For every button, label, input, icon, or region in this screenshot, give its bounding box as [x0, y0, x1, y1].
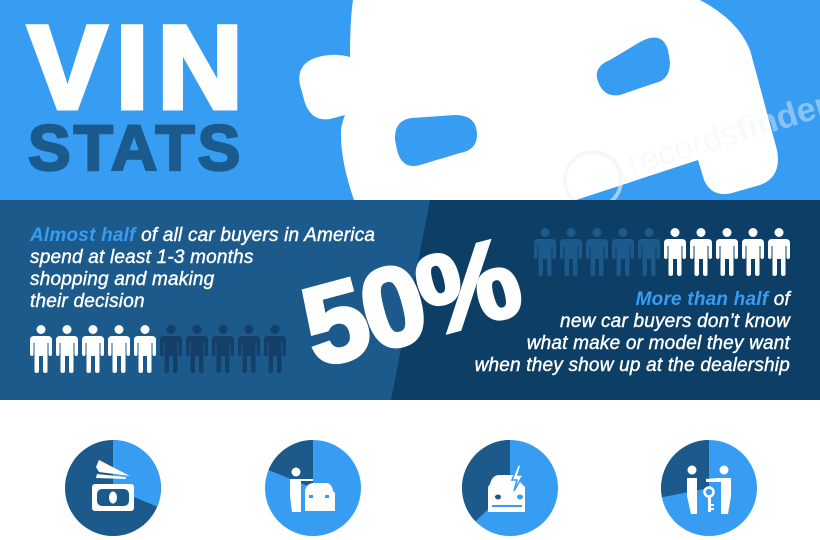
pie: handing keys: [661, 440, 757, 536]
pie charts with icons: [65, 440, 757, 536]
stats band: [0, 200, 820, 400]
left stat text: Almost half of all car buyers in America: [30, 225, 375, 246]
title: VIN: [28, 2, 252, 134]
left stat text: shopping and making: [30, 269, 214, 290]
right stat text: new car buyers don’t know: [560, 311, 790, 332]
right people icons: [534, 228, 790, 276]
title: STATS: [28, 112, 243, 184]
pie: electric car: [462, 440, 558, 536]
left stat text: spend at least 1-3 months: [30, 247, 254, 268]
left stat text: [30, 225, 375, 312]
right stat text: [475, 289, 792, 376]
left people icons: [30, 325, 286, 373]
right stat text: what make or model they want: [527, 333, 790, 354]
right stat text: More than half of: [636, 289, 790, 310]
pie: money: [65, 440, 161, 536]
50% big number: 50%: [290, 214, 530, 391]
right stat text: when they show up at the dealership: [475, 355, 790, 376]
left stat text: their decision: [30, 291, 145, 312]
car illustration: [299, 0, 820, 200]
header background: [0, 0, 820, 200]
pie: salesman and car: [265, 440, 361, 536]
